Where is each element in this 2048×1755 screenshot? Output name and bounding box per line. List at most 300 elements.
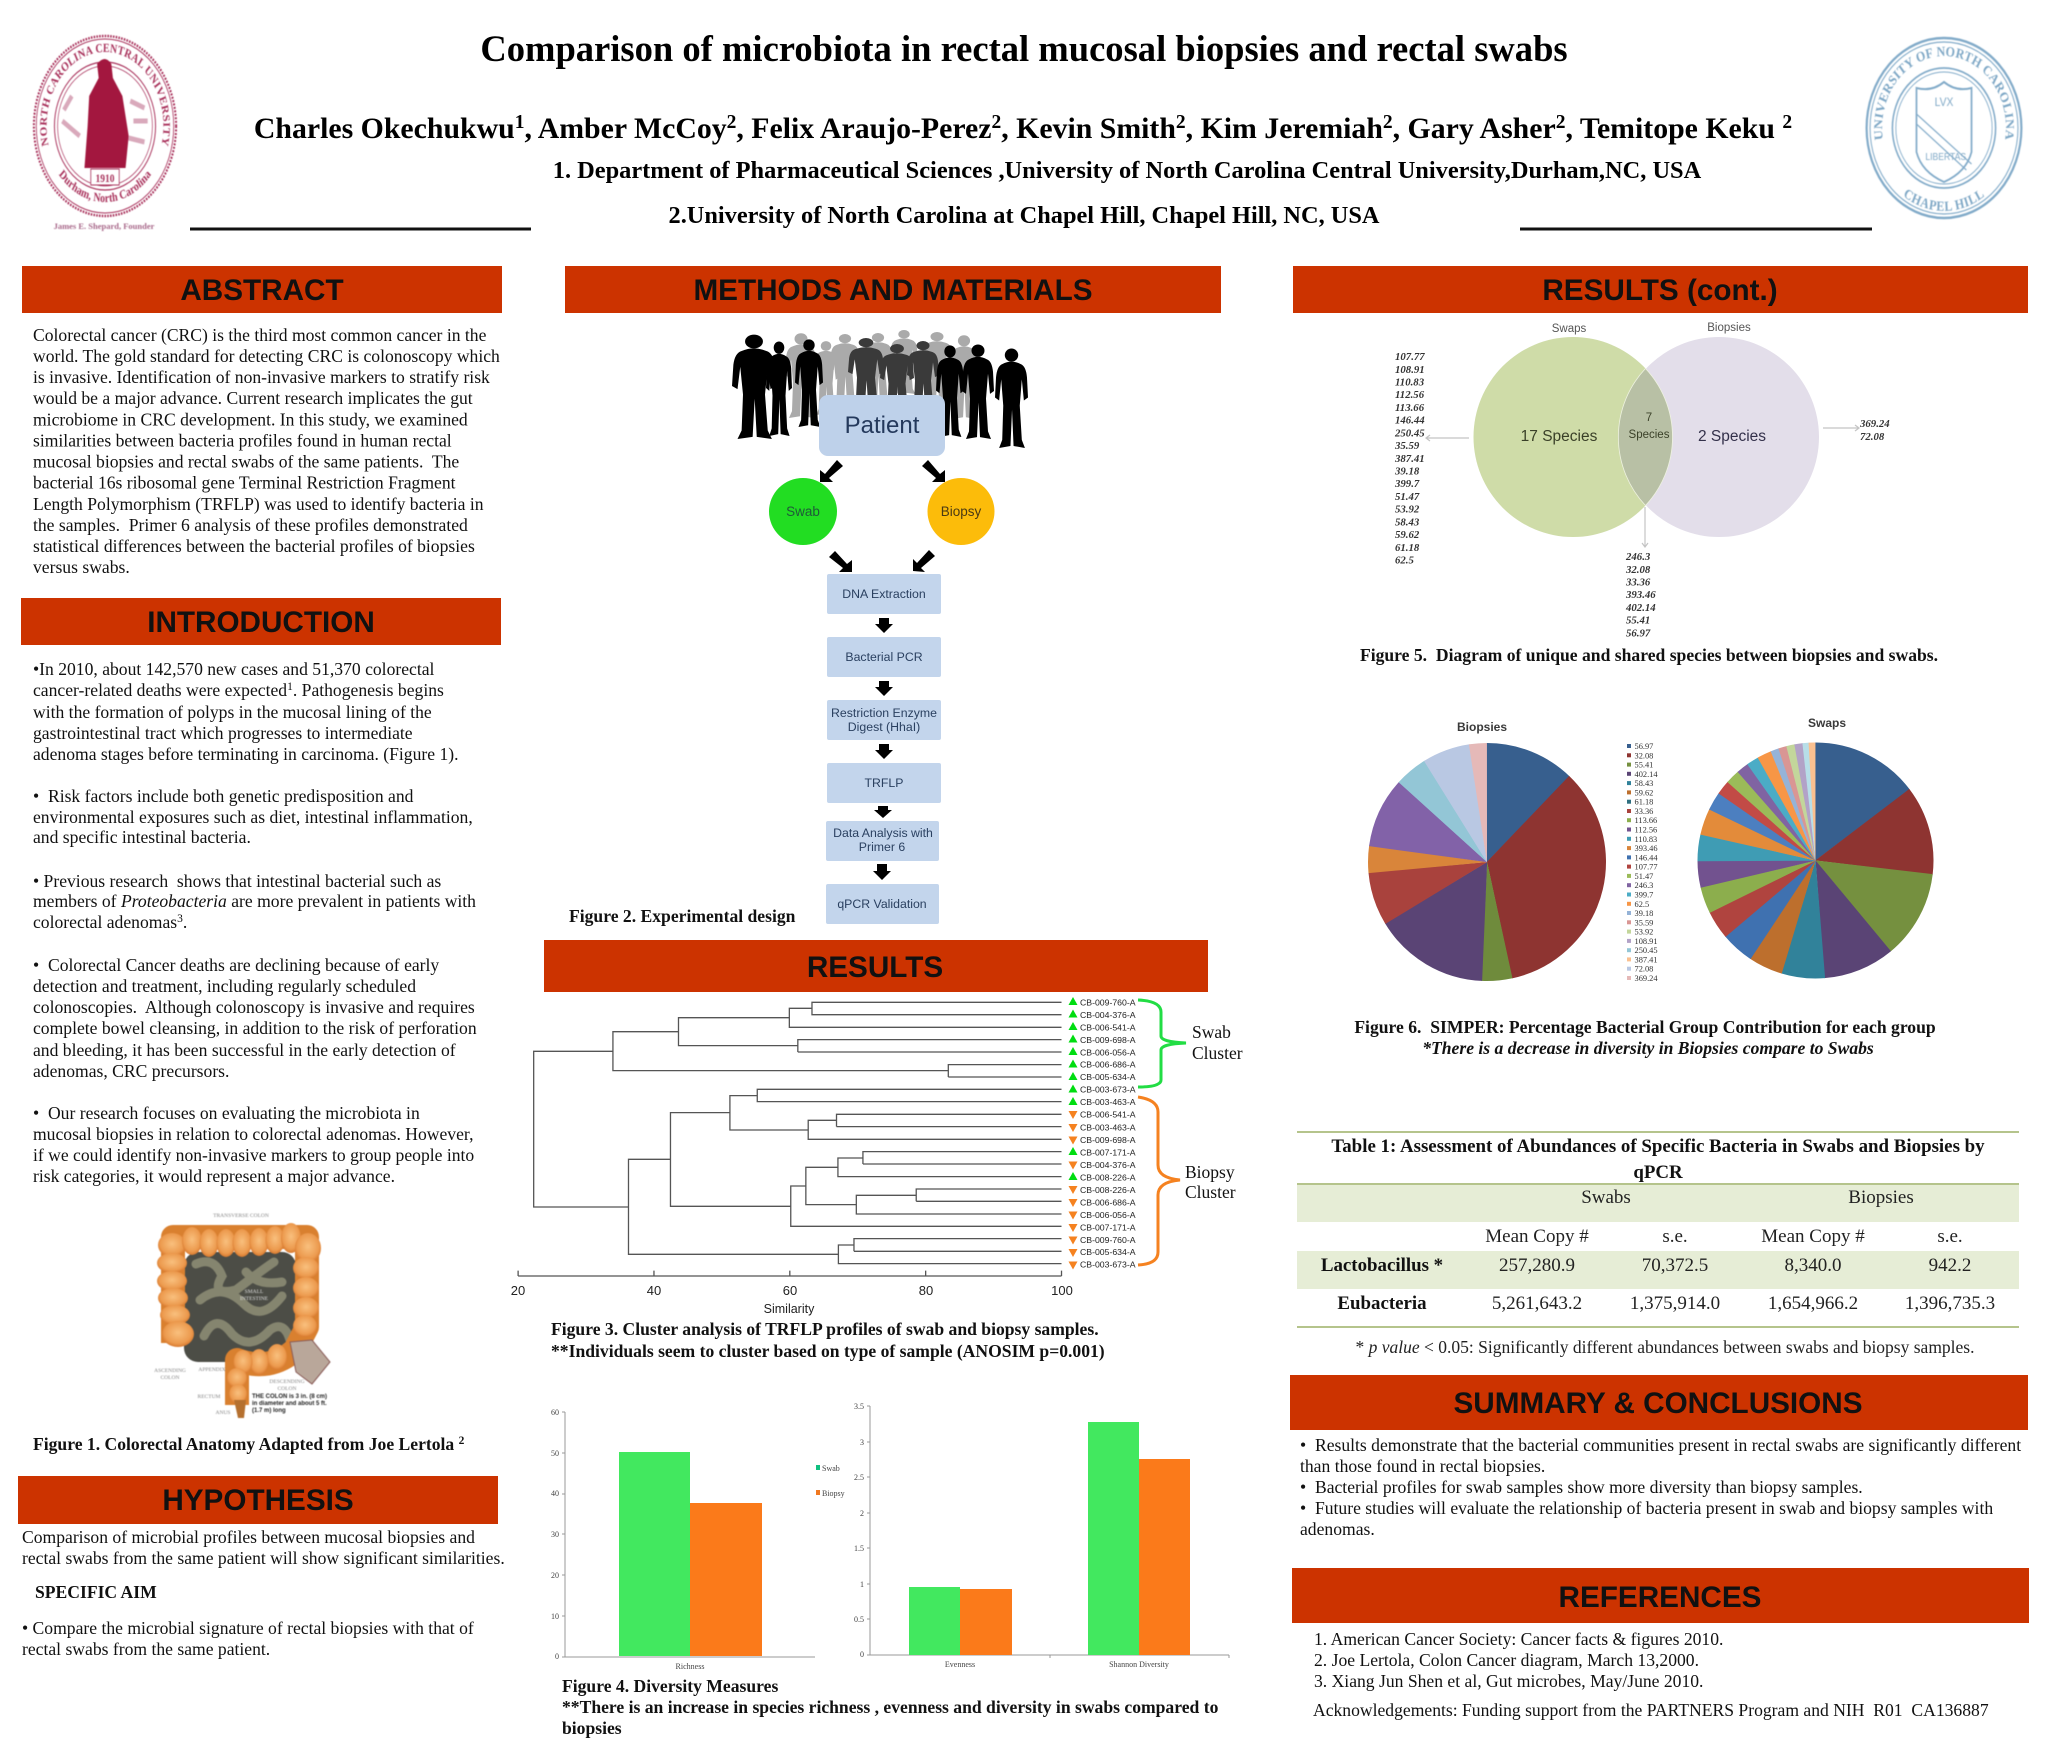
table 1: qPCR abundances: 942.2 — [1929, 1255, 1971, 1276]
bar chart: richness: 60 — [551, 1408, 559, 1417]
pie legend: 39.18 — [1634, 909, 1653, 918]
introduction text: if we could identify non-invasive markers to group people into — [33, 1145, 474, 1165]
table 1: qPCR abundances: Table 1: Assessment of Abundances of Specific Bacteria in Swabs and Biopsies by — [1331, 1136, 1985, 1157]
sample labels: CB-004-376-A — [1080, 1160, 1136, 1170]
axis labels — [511, 1283, 1073, 1316]
introduction heading — [21, 598, 501, 645]
venn list: biopsy-only species: 369.24 — [1859, 418, 1890, 430]
sample labels: CB-009-698-A — [1080, 1135, 1136, 1145]
figure 1: colon anatomy illustration: THE COLON is 3 in. (8 cm) — [252, 1394, 327, 1400]
bar chart: richness — [551, 1408, 815, 1671]
bar chart: evenness and Shannon diversity: 0.5 — [854, 1615, 864, 1624]
bar chart: evenness and Shannon diversity: 0 — [860, 1650, 864, 1659]
step: bacterial PCR: Bacterial PCR — [845, 650, 923, 664]
authors: 2 — [1383, 112, 1393, 133]
bar chart: richness: 50 — [551, 1449, 559, 1458]
rule: left — [190, 228, 531, 230]
introduction text: risk categories, it would represent a major advance. — [33, 1166, 395, 1186]
sample labels: CB-005-634-A — [1080, 1247, 1136, 1257]
summary heading: SUMMARY & CONCLUSIONS — [1453, 1387, 1863, 1420]
logo: University of North Carolina seal — [1864, 36, 2024, 220]
abstract heading — [22, 266, 502, 313]
panel: methods and materials — [565, 266, 1221, 926]
figure 6 caption — [1354, 1017, 1936, 1058]
step: qPCR validation: qPCR Validation — [837, 897, 927, 911]
venn list: swab-only species: 146.44 — [1395, 414, 1425, 426]
venn list: swab-only species — [1394, 351, 1425, 566]
sample labels: CB-006-056-A — [1080, 1048, 1136, 1058]
introduction text: gastrointestinal tract which progresses to intermediate — [33, 723, 413, 743]
figure 1: colon anatomy illustration: DESCENDING — [269, 1379, 305, 1385]
hypothesis text: rectal swabs from the same patient will show significant similarities. — [22, 1548, 505, 1568]
introduction text: •In 2010, about 142,570 new cases and 51,370 colorectal — [33, 659, 435, 679]
pie legend: 402.14 — [1634, 770, 1658, 779]
sample labels: CB-007-171-A — [1080, 1148, 1136, 1158]
pie legend: 35.59 — [1634, 918, 1653, 927]
figure 4 caption — [562, 1676, 1219, 1738]
authors: , Kevin Smith — [1001, 112, 1176, 145]
sample labels — [1080, 998, 1136, 1270]
table 1: qPCR abundances — [1297, 1131, 2019, 1328]
venn list: swab-only species: 387.41 — [1394, 453, 1425, 465]
step: DNA extraction: DNA Extraction — [842, 587, 926, 601]
summary heading — [1290, 1375, 2028, 1430]
table 1: qPCR abundances: Mean Copy # — [1485, 1226, 1589, 1247]
introduction text: members of Proteobacteria are more prevalent in patients with — [33, 891, 476, 911]
authors: Charles Okechukwu — [254, 112, 515, 145]
step: TRFLP — [827, 763, 941, 803]
introduction text: colonoscopies. Although colonoscopy is invasive and requires — [33, 997, 475, 1017]
bar chart: richness: Richness — [676, 1662, 704, 1671]
table 1: qPCR abundances: 1,396,735.3 — [1905, 1293, 1995, 1314]
introduction text: mucosal biopsies in relation to colorectal adenomas. However, — [33, 1124, 473, 1144]
venn list: swab-only species: 113.66 — [1395, 402, 1425, 414]
table 1: qPCR abundances: s.e. — [1937, 1226, 1963, 1247]
introduction text: adenomas, CRC precursors. — [33, 1061, 229, 1081]
pie legend: 113.66 — [1634, 816, 1657, 825]
acknowledgements: Acknowledgements: Funding support from the PARTNERS Program and NIH R01 CA136887 — [1313, 1700, 1989, 1720]
logo: North Carolina Central University seal: Durham, North Carolina — [58, 168, 152, 203]
venn list: shared species: 246.3 — [1625, 551, 1651, 563]
venn list: swab-only species: 53.92 — [1395, 504, 1420, 516]
pie legend: 250.45 — [1634, 946, 1658, 955]
summary text: than those found in rectal biopsies. — [1300, 1456, 1545, 1476]
sample labels: CB-005-634-A — [1080, 1072, 1136, 1082]
step: bacterial PCR — [827, 637, 941, 677]
results continued heading — [1293, 266, 2028, 313]
bar chart: richness: 20 — [551, 1571, 559, 1580]
methods heading — [565, 266, 1221, 313]
figure 1: colon anatomy illustration: APPENDIX — [198, 1367, 226, 1373]
specific aim: rectal swabs from the same patient. — [22, 1639, 270, 1659]
sample labels: CB-009-760-A — [1080, 1235, 1136, 1245]
venn list: shared species: 55.41 — [1626, 614, 1650, 626]
pie chart: biopsies — [1403, 720, 1571, 946]
swab cluster bracket: Cluster — [1192, 1043, 1243, 1063]
authors: , Amber McCoy — [524, 112, 727, 145]
introduction text: • Previous research shows that intestinal bacterial such as — [33, 871, 441, 891]
pie legend — [1627, 742, 1658, 983]
affiliation 1: 1. Department of Pharmaceutical Sciences ,University of North Carolina Central University,Durham,NC, USA — [553, 157, 1702, 184]
venn list: swab-only species: 112.56 — [1395, 389, 1425, 401]
pie legend: 107.77 — [1634, 863, 1658, 872]
venn list: shared species: 33.36 — [1625, 576, 1651, 588]
reference list: 3. Xiang Jun Shen et al, Gut microbes, May/June 2010. — [1314, 1671, 1703, 1691]
biopsy circle: Biopsy — [941, 504, 982, 519]
sample labels: CB-003-673-A — [1080, 1084, 1136, 1094]
sample labels: CB-009-698-A — [1080, 1035, 1136, 1045]
panel: abstract — [22, 266, 502, 577]
specific aim: • Compare the microbial signature of rectal biopsies with that of — [22, 1618, 474, 1638]
hypothesis heading: HYPOTHESIS — [162, 1484, 354, 1517]
introduction text: colorectal adenomas — [33, 912, 177, 932]
pie legend: 56.97 — [1634, 742, 1653, 751]
figure 1: colon anatomy illustration: COLON — [161, 1375, 179, 1381]
introduction text: . Pathogenesis begins — [293, 680, 444, 700]
introduction text: cancer-related deaths were expected — [33, 680, 287, 700]
biopsy circle — [928, 478, 994, 545]
pie legend: 369.24 — [1634, 974, 1658, 983]
rule: right — [1520, 228, 1872, 230]
authors: 2 — [992, 112, 1001, 133]
introduction text: and bleeding, it has been successful in the early detection of — [33, 1040, 456, 1060]
table 1: qPCR abundances: 257,280.9 — [1499, 1255, 1575, 1276]
venn arrows — [1426, 425, 1859, 547]
bar chart: richness: 30 — [551, 1530, 559, 1539]
biopsy cluster bracket: Cluster — [1185, 1182, 1236, 1202]
figure 1: colon anatomy illustration: INTESTINE — [240, 1296, 269, 1302]
bar chart: richness: 40 — [551, 1489, 559, 1498]
venn list: swab-only species: 61.18 — [1395, 542, 1420, 554]
venn diagram: Species — [1629, 429, 1670, 441]
venn diagram: Biopsies — [1707, 322, 1751, 334]
table 1: qPCR abundances: 5,261,643.2 — [1492, 1293, 1582, 1314]
pie legend: 33.36 — [1634, 807, 1653, 816]
references heading: REFERENCES — [1559, 1581, 1761, 1614]
sample labels: CB-006-541-A — [1080, 1022, 1136, 1032]
venn list: shared species: 56.97 — [1626, 628, 1651, 640]
venn diagram: 17 Species — [1521, 428, 1598, 445]
table 1: qPCR abundances: Lactobacillus * — [1321, 1255, 1443, 1276]
bar chart: evenness and Shannon diversity: 3.5 — [854, 1402, 864, 1411]
pie legend: 108.91 — [1634, 937, 1658, 946]
dendrogram chart — [511, 997, 1243, 1316]
introduction text: • Colorectal Cancer deaths are declining because of early — [33, 955, 439, 975]
table 1: qPCR abundances: 1,375,914.0 — [1630, 1293, 1720, 1314]
bar chart: evenness and Shannon diversity — [854, 1402, 1229, 1669]
introduction text: environmental exposures such as diet, intestinal inflammation, — [33, 807, 473, 827]
logo: North Carolina Central University seal: 1910 — [96, 172, 114, 185]
venn list: swab-only species: 107.77 — [1395, 351, 1425, 363]
pie legend: 32.08 — [1634, 751, 1653, 760]
panel: references — [1292, 1568, 2029, 1720]
abstract text: statistical differences between the bacterial profiles of biopsies — [33, 536, 475, 556]
step: qPCR validation — [826, 884, 939, 924]
arrows: between workflow steps — [873, 618, 893, 880]
bar chart: evenness and Shannon diversity: 1 — [860, 1580, 864, 1589]
introduction text: . — [183, 912, 187, 932]
table 1: qPCR abundances: Eubacteria — [1337, 1293, 1427, 1314]
figure 1: colon anatomy illustration: ANUS — [216, 1410, 230, 1416]
venn list: biopsy-only species — [1859, 418, 1890, 443]
introduction text: with the formation of polyps in the mucosal lining of the — [33, 702, 432, 722]
results continued heading: RESULTS (cont.) — [1542, 274, 1778, 307]
panel: hypothesis — [18, 1476, 505, 1659]
abstract text — [33, 325, 500, 577]
axis labels: 20 — [511, 1283, 525, 1298]
abstract text: is invasive. Identification of non-invasive markers to stratify risk — [33, 367, 490, 387]
table footnote: * p value < 0.05: Significantly different abundances between swabs and biopsy samples. — [1356, 1337, 1974, 1357]
table 1: qPCR abundances: Biopsies — [1848, 1187, 1914, 1208]
pie legend: 146.44 — [1634, 853, 1658, 862]
introduction text: • Risk factors include both genetic predisposition and — [33, 786, 414, 806]
pie legend: 62.5 — [1634, 900, 1649, 909]
abstract text: similarities between bacteria profiles found in human rectal — [33, 430, 452, 450]
authors: , Kim Jeremiah — [1186, 112, 1383, 145]
table 1: qPCR abundances: 1,654,966.2 — [1768, 1293, 1858, 1314]
sample labels: CB-007-171-A — [1080, 1222, 1136, 1232]
venn list: swab-only species: 51.47 — [1395, 491, 1420, 503]
pie legend: 112.56 — [1634, 826, 1657, 834]
sample labels: CB-008-226-A — [1080, 1185, 1136, 1195]
patient box: Patient — [845, 412, 920, 439]
logo: University of North Carolina seal: LVX — [1935, 96, 1954, 109]
venn list: swab-only species: 399.7 — [1394, 478, 1420, 490]
figure 3 caption — [551, 1319, 1105, 1361]
figure 4 caption: biopsies — [562, 1718, 622, 1738]
venn list: swab-only species: 35.59 — [1394, 440, 1420, 452]
venn list: shared species: 32.08 — [1625, 564, 1651, 576]
table 1: qPCR abundances: qPCR — [1633, 1162, 1683, 1183]
summary text — [1300, 1435, 2021, 1539]
panel: summary and conclusions — [1290, 1375, 2028, 1539]
pie legend: 55.41 — [1634, 761, 1653, 770]
summary text: • Future studies will evaluate the relationship of bacteria present in swab and biopsy samples with — [1300, 1498, 1993, 1518]
bar chart: richness: 0 — [555, 1652, 559, 1661]
specific aim: SPECIFIC AIM — [35, 1582, 157, 1602]
logo: University of North Carolina seal: CHAPEL HILL — [1904, 189, 1984, 212]
results heading: RESULTS — [807, 951, 943, 984]
axis labels: Similarity — [764, 1302, 815, 1316]
pie legend: 72.08 — [1634, 965, 1653, 974]
venn list: swab-only species: 108.91 — [1395, 364, 1425, 376]
biopsy cluster bracket: Biopsy — [1185, 1162, 1235, 1182]
swab cluster bracket — [1138, 1000, 1243, 1087]
venn diagram — [1474, 322, 1819, 537]
axis labels: 60 — [783, 1283, 797, 1298]
figure 1: colon anatomy illustration — [154, 1213, 330, 1418]
authors: , Gary Asher — [1393, 112, 1556, 145]
bar chart: evenness and Shannon diversity: Shannon Diversity — [1109, 1660, 1169, 1669]
figure 5 caption: Figure 5. Diagram of unique and shared species between biopsies and swabs. — [1360, 645, 1938, 665]
affiliation 2: 2.University of North Carolina at Chapel Hill, Chapel Hill, NC, USA — [669, 202, 1380, 229]
pie legend: 59.62 — [1634, 788, 1653, 797]
figure 1: colon anatomy illustration: (1.7 m) long — [252, 1408, 286, 1414]
pie legend: 110.83 — [1634, 835, 1657, 844]
axis labels: 100 — [1051, 1283, 1073, 1298]
pie legend: 53.92 — [1634, 928, 1653, 937]
figure 3 caption: Figure 3. Cluster analysis of TRFLP profiles of swab and biopsy samples. — [551, 1319, 1099, 1339]
figure 2 caption: Figure 2. Experimental design — [569, 906, 796, 926]
table 1: qPCR abundances: Mean Copy # — [1761, 1226, 1865, 1247]
logo: North Carolina Central University seal: James E. Shepard, Founder — [54, 221, 155, 231]
swab cluster bracket: Swab — [1192, 1022, 1231, 1042]
reference list: 1. American Cancer Society: Cancer facts & figures 2010. — [1314, 1629, 1723, 1649]
venn list: shared species — [1625, 551, 1656, 640]
chart legend: Biopsy — [822, 1489, 845, 1498]
sample labels: CB-006-686-A — [1080, 1060, 1136, 1070]
table 1: qPCR abundances: 70,372.5 — [1642, 1255, 1708, 1276]
sample labels: CB-006-541-A — [1080, 1110, 1136, 1120]
pie legend: 246.3 — [1634, 881, 1653, 890]
authors: 2 — [1176, 112, 1186, 133]
step: TRFLP: TRFLP — [865, 776, 903, 790]
figure 1: colon anatomy illustration: COLON — [278, 1386, 296, 1392]
authors: 2 — [727, 112, 736, 133]
chart legend: Swab — [822, 1464, 840, 1473]
panel: results continued — [1293, 266, 2028, 1357]
step: DNA extraction — [827, 574, 941, 614]
abstract text: would be a major advance. Current research implicates the gut — [33, 388, 473, 408]
hypothesis heading — [18, 1476, 498, 1524]
abstract text: versus swabs. — [33, 557, 130, 577]
venn list: shared species: 402.14 — [1625, 602, 1656, 614]
bar chart: richness: 10 — [551, 1612, 559, 1621]
reference list: 2. Joe Lertola, Colon Cancer diagram, March 13,2000. — [1314, 1650, 1699, 1670]
swab circle — [769, 478, 837, 545]
venn list: shared species: 393.46 — [1625, 589, 1656, 601]
bar chart: evenness and Shannon diversity: 2.5 — [854, 1473, 864, 1482]
introduction heading: INTRODUCTION — [147, 606, 375, 639]
sample labels: CB-003-463-A — [1080, 1097, 1136, 1107]
pie legend: 58.43 — [1634, 779, 1653, 788]
introduction text: 1 — [287, 681, 293, 693]
hypothesis text — [22, 1527, 505, 1568]
venn list: swab-only species: 62.5 — [1395, 554, 1414, 566]
venn diagram: Swaps — [1552, 323, 1587, 335]
panel: introduction — [21, 598, 501, 1454]
sample labels: CB-008-226-A — [1080, 1172, 1136, 1182]
introduction text: • Our research focuses on evaluating the microbiota in — [33, 1103, 420, 1123]
summary text: adenomas. — [1300, 1519, 1375, 1539]
sample labels: CB-006-686-A — [1080, 1198, 1136, 1208]
abstract text: microbiome in CRC development. In this study, we examined — [33, 410, 468, 430]
introduction text: and specific intestinal bacteria. — [33, 827, 251, 847]
venn list: swab-only species: 250.45 — [1394, 428, 1425, 440]
figure 1 caption: Figure 1. Colorectal Anatomy Adapted from Joe Lertola — [33, 1434, 454, 1454]
specific aim — [22, 1582, 474, 1659]
pie legend: 393.46 — [1634, 844, 1658, 853]
hypothesis text: Comparison of microbial profiles between mucosal biopsies and — [22, 1527, 475, 1547]
figure 4 caption: **There is an increase in species richness , evenness and diversity in swabs compared to — [562, 1697, 1219, 1717]
figure 1: colon anatomy illustration: RECTUM — [198, 1394, 221, 1400]
step: data analysis: Primer 6 — [859, 840, 905, 854]
authors: , Felix Araujo-Perez — [736, 112, 992, 145]
figure 1 caption: 2 — [459, 1435, 465, 1447]
step: restriction enzyme digest: Digest (HhaI) — [848, 720, 920, 734]
venn list: biopsy-only species: 72.08 — [1860, 431, 1885, 443]
venn diagram: 7 — [1646, 412, 1652, 424]
reference list — [1314, 1629, 1723, 1691]
authors: 2 — [1782, 112, 1792, 133]
pie legend: 51.47 — [1634, 872, 1653, 881]
logo: University of North Carolina seal: UNIVERSITY OF NORTH CAROLINA — [1874, 46, 2014, 140]
introduction text: detection and treatment, including regularly scheduled — [33, 976, 416, 996]
abstract text: Length Polymorphism (TRFLP) was used to identify bacteria in — [33, 494, 484, 514]
venn list: swab-only species: 59.62 — [1395, 529, 1420, 541]
axis labels: 40 — [647, 1283, 661, 1298]
pie legend: 399.7 — [1634, 890, 1653, 900]
summary text: • Bacterial profiles for swab samples show more diversity than biopsy samples. — [1300, 1477, 1863, 1497]
panel: results — [511, 940, 1243, 1738]
figure 3 caption: **Individuals seem to cluster based on type of sample (ANOSIM p=0.001) — [551, 1341, 1105, 1361]
abstract heading: ABSTRACT — [180, 274, 344, 307]
figure 1: colon anatomy illustration: in diameter and about 5 ft. — [252, 1401, 327, 1407]
sample labels: CB-003-673-A — [1080, 1260, 1136, 1270]
abstract text: world. The gold standard for detecting CRC is colonoscopy which — [33, 346, 500, 366]
sample labels: CB-006-056-A — [1080, 1210, 1136, 1220]
authors: 1 — [515, 112, 524, 133]
table 1: qPCR abundances: s.e. — [1662, 1226, 1688, 1247]
summary text: • Results demonstrate that the bacterial communities present in rectal swabs are significantly different — [1300, 1435, 2021, 1455]
figure 1: colon anatomy illustration: ASCENDING — [154, 1368, 186, 1374]
bar chart: evenness and Shannon diversity: Evenness — [945, 1660, 975, 1669]
abstract text: bacterial 16s ribosomal gene Terminal Restriction Fragment — [33, 472, 456, 492]
chart legend — [816, 1464, 845, 1498]
swab circle: Swab — [786, 504, 820, 519]
bar chart: evenness and Shannon diversity: 3 — [860, 1438, 864, 1447]
authors: , Temitope Keku — [1565, 112, 1782, 145]
biopsy cluster bracket — [1138, 1097, 1236, 1265]
arrows: patient to samples and samples to extraction — [820, 460, 945, 572]
venn diagram: 2 Species — [1698, 428, 1766, 445]
results heading — [544, 940, 1208, 992]
logo: University of North Carolina seal: LIBERTAS — [1925, 151, 1966, 162]
bar chart: evenness and Shannon diversity: 1.5 — [854, 1544, 864, 1553]
pie chart: biopsies: Biopsies — [1457, 720, 1507, 734]
step: data analysis — [826, 821, 939, 861]
pie chart: swabs — [1732, 716, 1899, 944]
venn list: swab-only species: 110.83 — [1395, 376, 1425, 388]
bar chart: evenness and Shannon diversity: 2 — [860, 1509, 864, 1518]
table 1: qPCR abundances: 8,340.0 — [1784, 1255, 1842, 1276]
figure 4 caption: Figure 4. Diversity Measures — [562, 1676, 778, 1696]
references heading — [1292, 1568, 2029, 1623]
methods heading: METHODS AND MATERIALS — [693, 274, 1093, 307]
pie legend: 387.41 — [1634, 955, 1658, 964]
introduction text: complete bowel cleansing, in addition to the risk of perforation — [33, 1018, 477, 1038]
abstract text: the samples. Primer 6 analysis of these profiles demonstrated — [33, 515, 468, 535]
step: data analysis: Data Analysis with — [833, 826, 933, 840]
sample labels: CB-009-760-A — [1080, 998, 1136, 1008]
sample markers — [1068, 997, 1078, 1270]
step: restriction enzyme digest — [827, 700, 941, 740]
sample labels: CB-003-463-A — [1080, 1122, 1136, 1132]
venn list: swab-only species: 39.18 — [1394, 466, 1420, 478]
introduction text: 3 — [177, 913, 183, 925]
logo: North Carolina Central University seal — [32, 34, 178, 232]
axis labels: 80 — [919, 1283, 933, 1298]
logo: North Carolina Central University seal: NORTH CAROLINA CENTRAL UNIVERSITY — [39, 43, 171, 148]
introduction text — [33, 659, 477, 1186]
authors: 2 — [1556, 112, 1565, 133]
table 1: qPCR abundances: Swabs — [1581, 1187, 1631, 1208]
figure 6 caption: Figure 6. SIMPER: Percentage Bacterial Group Contribution for each group — [1354, 1017, 1936, 1037]
step: restriction enzyme digest: Restriction Enzyme — [831, 706, 937, 720]
venn list: swab-only species: 58.43 — [1395, 516, 1420, 528]
introduction text: adenoma stages before terminating in carcinoma. (Figure 1). — [33, 744, 459, 764]
title: Comparison of microbiota in rectal mucosal biopsies and rectal swabs — [480, 28, 1568, 69]
